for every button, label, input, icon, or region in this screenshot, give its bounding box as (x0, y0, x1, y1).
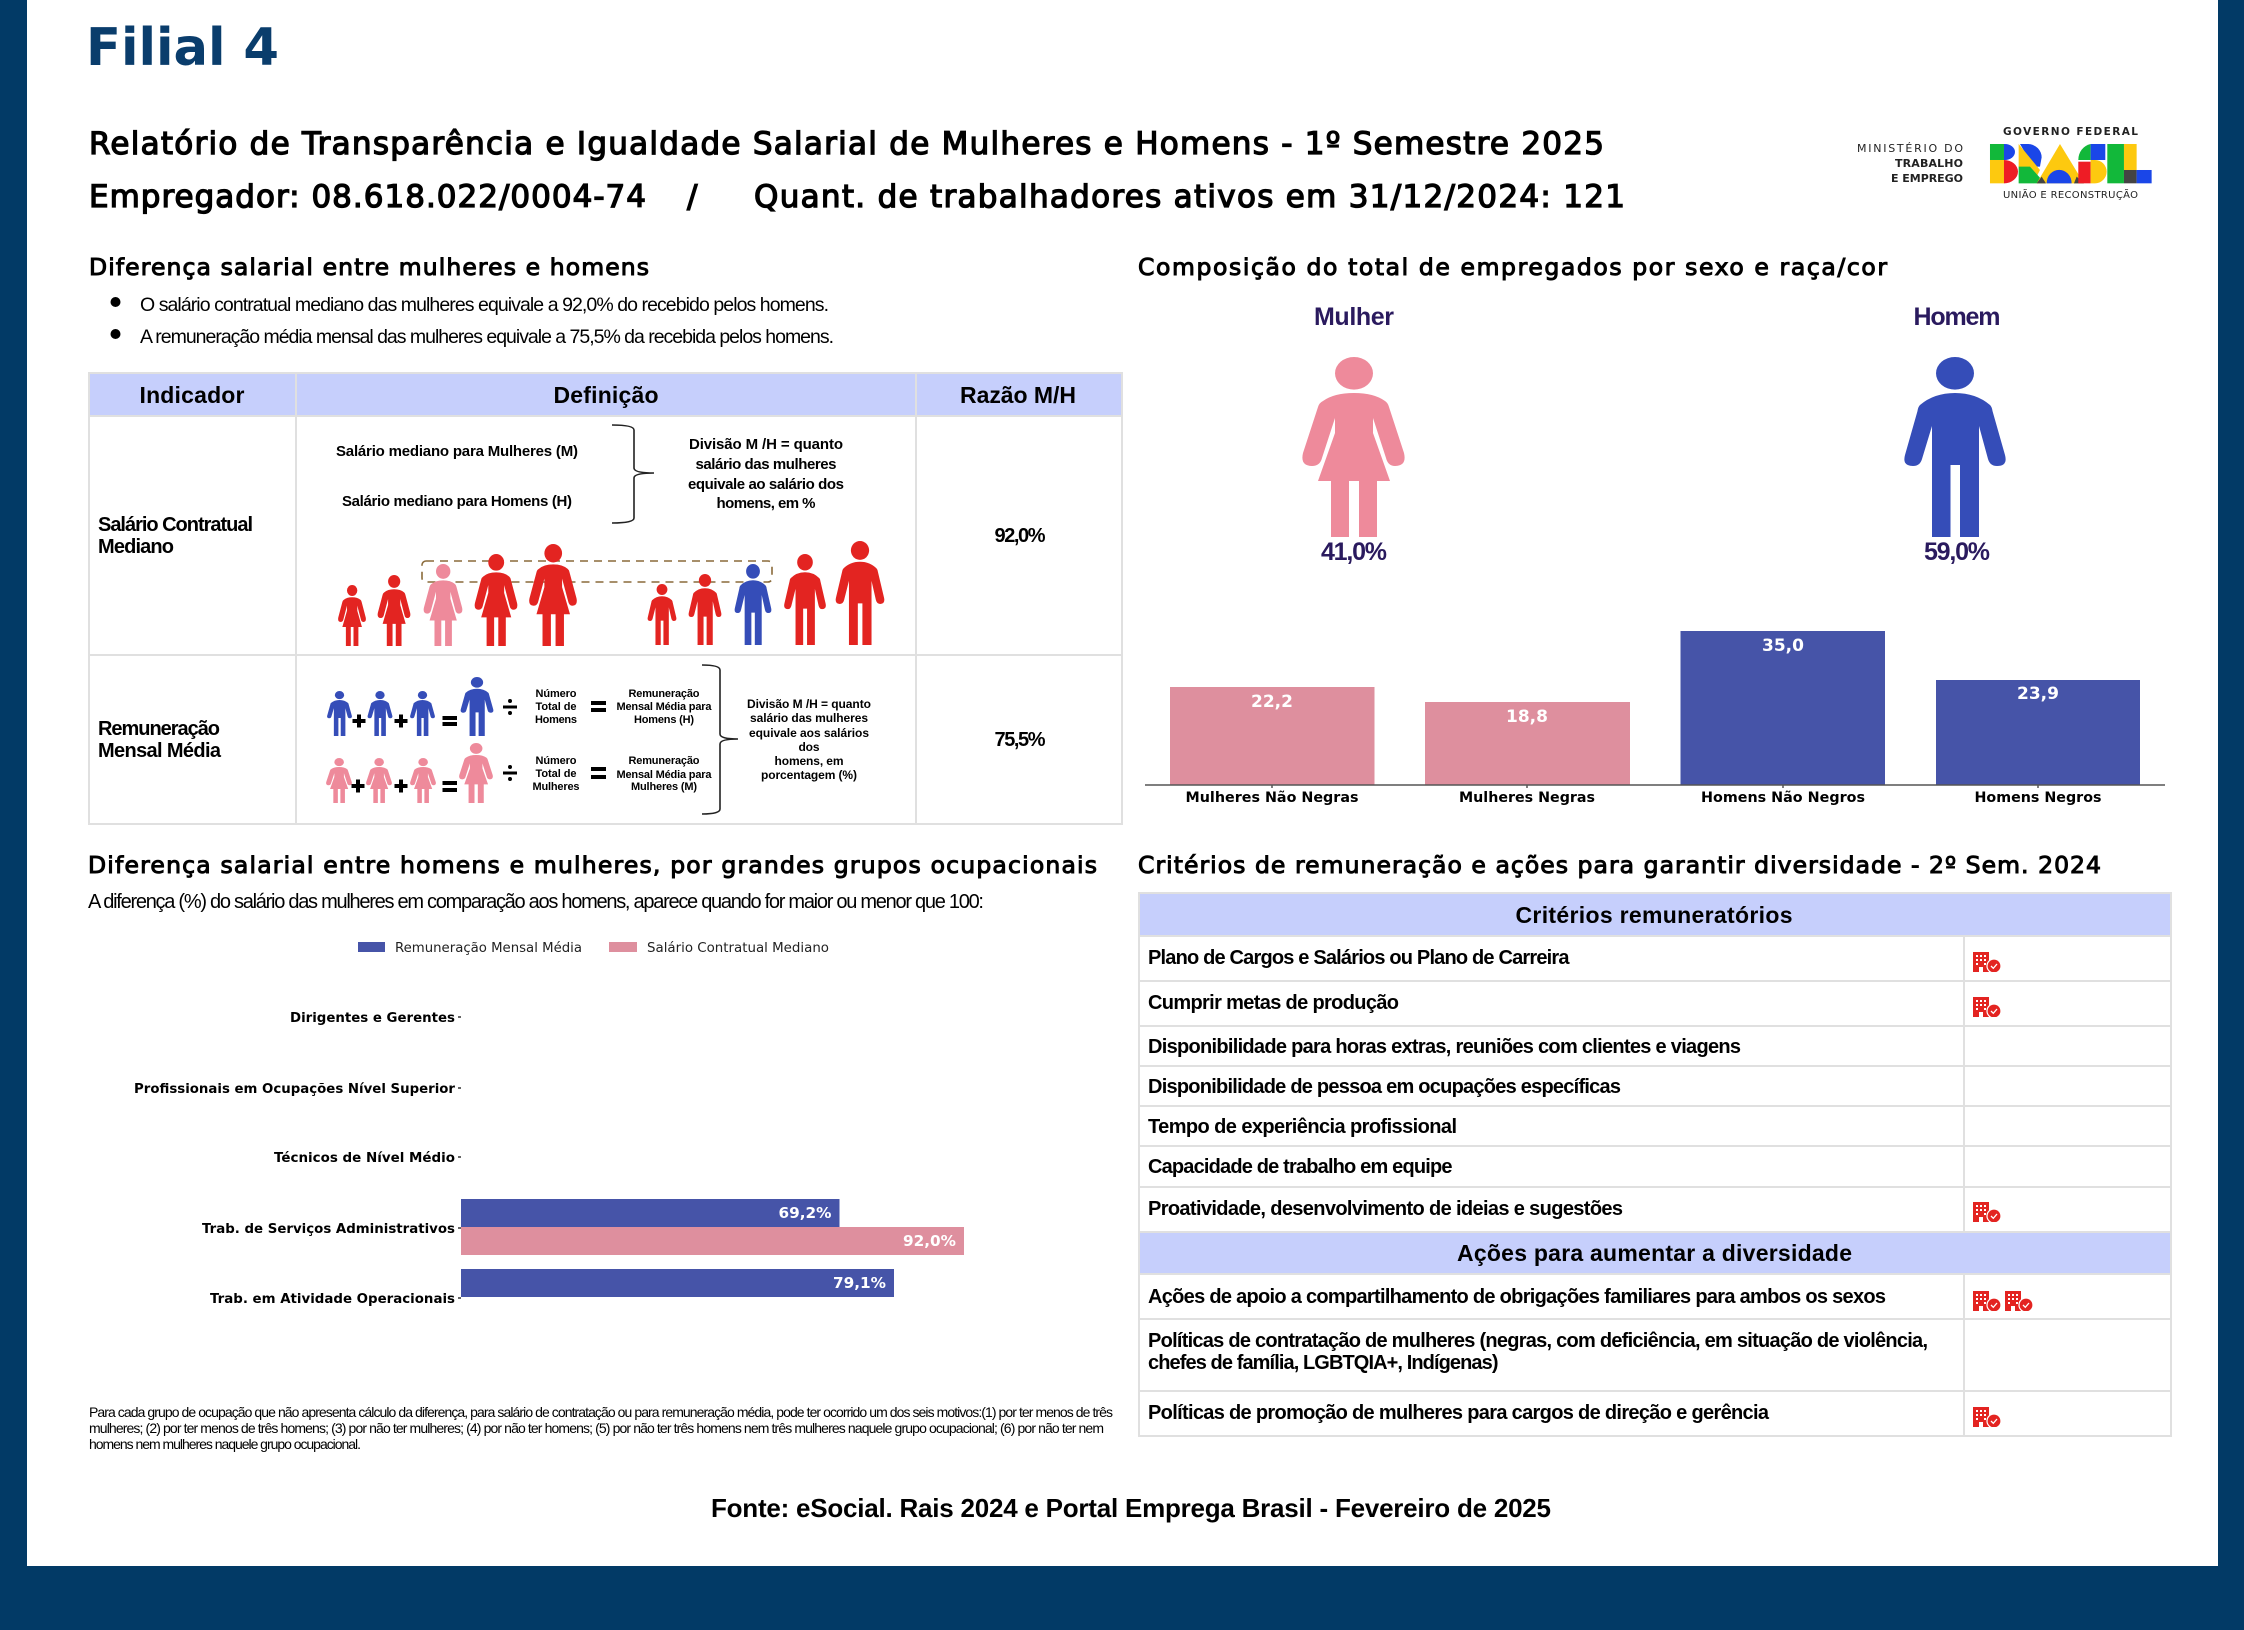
table grid (89, 373, 1122, 824)
bar chart: occupational groups (134, 1011, 964, 1307)
criteria labels: Capacidade de trabalho em equipe (1148, 1156, 1452, 1178)
ratio value: 92,0%: 92,0% (994, 525, 1046, 547)
icon: man (1904, 357, 2006, 537)
category axis labels: Trab. de Serviços Administrativos (202, 1222, 455, 1237)
action labels: Ações de apoio a compartilhamento de obrigações familiares para ambos os sexos (1148, 1286, 1886, 1308)
report title (89, 126, 1625, 215)
band: actions header (1139, 1232, 2171, 1274)
logo: Ministério do Trabalho e Emprego / Governo Federal Brasil: MINISTÉRIO DO (1857, 142, 1963, 155)
bar: Serviços Administrativos salário 92,0%: 92,0% (903, 1232, 956, 1250)
bar: Serviços Administrativos remuneração 69,2%: 69,2% (778, 1204, 832, 1222)
category axis labels: Profissionais em Ocupações Nível Superior (134, 1082, 456, 1097)
category labels: Homens Negros (1974, 790, 2102, 806)
equation: women average pay: Mensal Média para (616, 769, 712, 781)
row label: Salário Contratual Mediano: Salário Contratual (98, 514, 253, 536)
criteria labels: Cumprir metas de produção (1148, 992, 1399, 1014)
source line: Fonte: eSocial. Rais 2024 e Portal Emprega Brasil - Fevereiro de 2025 (711, 1493, 1551, 1523)
criteria labels: Disponibilidade para horas extras, reuniões com clientes e viagens (1148, 1036, 1741, 1058)
bar: Serviços Administrativos remuneração 69,2% (461, 1199, 840, 1227)
logo: Ministério do Trabalho e Emprego / Governo Federal Brasil: UNIÃO E RECONSTRUÇÃO (2003, 188, 2138, 201)
row label: Remuneração Mensal Média: Remuneração (98, 718, 220, 740)
category axis labels: Trab. em Atividade Operacionais (210, 1292, 455, 1307)
equation: men average pay (327, 677, 712, 736)
median division explanation: homens, em % (716, 495, 816, 512)
category axis labels (134, 1011, 456, 1307)
ratio value: 75,5%: 75,5% (994, 729, 1046, 751)
category labels: Mulheres Negras (1459, 790, 1595, 806)
bar: Homens Não Negros 35,0 (1680, 631, 1885, 785)
chart legend: Remuneração Mensal Média (395, 941, 582, 956)
report title: Quant. de trabalhadores ativos em 31/12/2024: 121 (754, 179, 1625, 215)
category axis labels: Técnicos de Nível Médio (274, 1151, 455, 1166)
table grid (1139, 893, 2171, 1436)
label: Homem: Homem (1914, 303, 2000, 331)
average division explanation: equivale aos salários (749, 726, 869, 740)
value: 41,0%: 41,0% (1321, 538, 1387, 566)
average division explanation (747, 697, 871, 782)
median division explanation (688, 436, 844, 512)
section heading: Diferença salarial entre mulheres e homens: Diferença salarial entre mulheres e homens (89, 253, 649, 281)
bar: Serviços Administrativos salário 92,0% (461, 1227, 964, 1255)
icons: men ordered by salary (648, 541, 884, 645)
header: Critérios remuneratórios: Critérios remuneratórios (1516, 902, 1792, 928)
row label: Salário Contratual Mediano: Mediano (98, 536, 174, 558)
median division explanation: equivale ao salário dos (688, 476, 844, 493)
icons: company criteria markers (1973, 952, 2033, 1428)
equation: men average pay: Homens (H) (634, 714, 694, 726)
median division explanation: salário das mulheres (696, 456, 836, 473)
criteria labels: Proatividade, desenvolvimento de ideias e sugestões (1148, 1198, 1623, 1220)
bullet list: key ratios: A remuneração média mensal das mulheres equivale a 75,5% da recebida pelos homens. (140, 326, 834, 348)
equation: women average pay: Total de (536, 768, 576, 780)
row label: Remuneração Mensal Média (98, 718, 222, 762)
equation: men average pay: Remuneração (628, 688, 700, 700)
report title: Empregador: 08.618.022/0004-74 (89, 179, 646, 215)
action labels (1148, 1286, 1928, 1424)
footnote (89, 1404, 1113, 1452)
report title: Relatório de Transparência e Igualdade Salarial de Mulheres e Homens - 1º Semestre 2025 (89, 126, 1604, 162)
bar: Atividade Operacionais remuneração 79,1%: 79,1% (833, 1274, 886, 1292)
footnote: mulheres; (2) por ter menos de três homens; (3) por não ter mulheres; (4) por não ter homens; (5) por não ter três homens nem três mulheres naquele grupo ocupacional; (6) por não ter nem (89, 1420, 1104, 1436)
band: criteria header (1139, 893, 2171, 936)
heading: Filial 4: Filial 4 (86, 18, 279, 78)
equation: women average pay: Mulheres (M) (631, 781, 697, 793)
bar: Mulheres Negras 18,8 (1425, 702, 1630, 785)
logo: Ministério do Trabalho e Emprego / Governo Federal Brasil: E EMPREGO (1891, 172, 1963, 185)
equation: men average pay: Total de (536, 701, 576, 713)
row label: Salário Contratual Mediano (98, 514, 253, 558)
criteria labels: Tempo de experiência profissional (1148, 1116, 1457, 1138)
median salary labels: Salário mediano para Homens (H) (342, 493, 572, 510)
bar: Mulheres Negras 18,8: 18,8 (1506, 707, 1548, 727)
category labels: Mulheres Não Negras (1186, 790, 1358, 806)
header: Ações para aumentar a diversidade: Ações para aumentar a diversidade (1457, 1240, 1852, 1266)
footnote: Para cada grupo de ocupação que não apresenta cálculo da diferença, para salário de contratação ou para remuneração média, pode ter ocorrido um dos seis motivos:(1) por ter menos de três (89, 1404, 1113, 1420)
action labels: Políticas de promoção de mulheres para cargos de direção e gerência (1148, 1402, 1770, 1424)
bar: Homens Não Negros 35,0: 35,0 (1762, 636, 1804, 656)
chart legend: Salário Contratual Mediano (647, 941, 829, 956)
bar: Mulheres Não Negras 22,2: 22,2 (1251, 692, 1293, 712)
logo: Ministério do Trabalho e Emprego / Governo Federal Brasil (1857, 126, 2152, 201)
label: Mulher: Mulher (1314, 303, 1394, 331)
table header band (89, 373, 1122, 416)
value: 59,0%: 59,0% (1924, 538, 1990, 566)
bullet list: key ratios (110, 294, 834, 348)
bar chart: composition by race (1145, 631, 2165, 806)
average division explanation: homens, em (774, 754, 844, 768)
bar: Mulheres Não Negras 22,2 (1170, 687, 1374, 785)
bar: Homens Negros 23,9: 23,9 (2017, 684, 2059, 704)
brace: median salaries (612, 425, 654, 523)
icon: woman (1302, 357, 1405, 537)
chart subtitle: A diferença (%) do salário das mulheres em comparação aos homens, aparece quando for maior ou menor que 100: (88, 891, 984, 913)
panel: composition by sex (1302, 303, 2006, 566)
action labels: Políticas de contratação de mulheres (negras, com deficiência, em situação de violência, (1148, 1330, 1928, 1352)
criteria labels: Plano de Cargos e Salários ou Plano de Carreira (1148, 947, 1570, 969)
equation: women average pay: Remuneração (628, 755, 700, 767)
action labels: chefes de família, LGBTQIA+, Indígenas) (1148, 1352, 1498, 1374)
average division explanation: porcentagem (%) (761, 768, 857, 782)
header: Definição: Definição (554, 382, 658, 408)
median division explanation: Divisão M /H = quanto (689, 436, 843, 453)
average division explanation: dos (798, 740, 820, 754)
dashed median highlight (422, 561, 772, 582)
bar: Atividade Operacionais remuneração 79,1% (461, 1269, 894, 1297)
logo: Ministério do Trabalho e Emprego / Governo Federal Brasil: TRABALHO (1895, 157, 1963, 170)
category labels: Homens Não Negros (1701, 790, 1865, 806)
bullet list: key ratios: O salário contratual mediano das mulheres equivale a 92,0% do recebido pelos homens. (140, 294, 829, 316)
average division explanation: salário das mulheres (750, 711, 868, 725)
row label: Remuneração Mensal Média: Mensal Média (98, 740, 222, 762)
header: Indicador: Indicador (140, 382, 245, 408)
logo: Ministério do Trabalho e Emprego / Governo Federal Brasil: GOVERNO FEDERAL (2003, 126, 2138, 138)
section heading: Critérios de remuneração: Critérios de remuneração e ações para garantir diversidade - 2º Sem. 2024 (1138, 851, 2101, 879)
report title: / (687, 179, 698, 215)
chart legend (358, 941, 829, 956)
median salary labels: Salário mediano para Mulheres (M) (336, 443, 578, 460)
section heading: Composição do total de empregados: Composição do total de empregados por sexo e raça/cor (1138, 253, 1887, 281)
equation: men average pay: Homens (535, 714, 577, 726)
equation: women average pay: Número (536, 755, 577, 767)
criteria labels (1148, 947, 1741, 1220)
section heading: grandes grupos ocupacionais: Diferença salarial entre homens e mulheres, por grandes grupos ocupacionais (88, 851, 1097, 879)
median salary labels (336, 443, 578, 510)
category labels (1186, 790, 2102, 806)
footnote: homens nem mulheres naquele grupo ocupacional. (89, 1436, 361, 1452)
average division explanation: Divisão M /H = quanto (747, 697, 871, 711)
category axis labels: Dirigentes e Gerentes (290, 1011, 455, 1026)
equation: men average pay: Mensal Média para (616, 701, 712, 713)
bar: Homens Negros 23,9 (1936, 680, 2140, 785)
icons: women ordered by salary (338, 544, 577, 646)
criteria labels: Disponibilidade de pessoa em ocupações específicas (1148, 1076, 1621, 1098)
equation: women average pay (326, 743, 712, 803)
header: Razão M/H: Razão M/H (960, 382, 1076, 408)
panel: indicator table (89, 373, 1122, 824)
equation: women average pay: Mulheres (532, 781, 580, 793)
panel: criteria table (1139, 893, 2171, 1436)
equation: men average pay: Número (536, 688, 577, 700)
brace: average pay (702, 665, 738, 814)
